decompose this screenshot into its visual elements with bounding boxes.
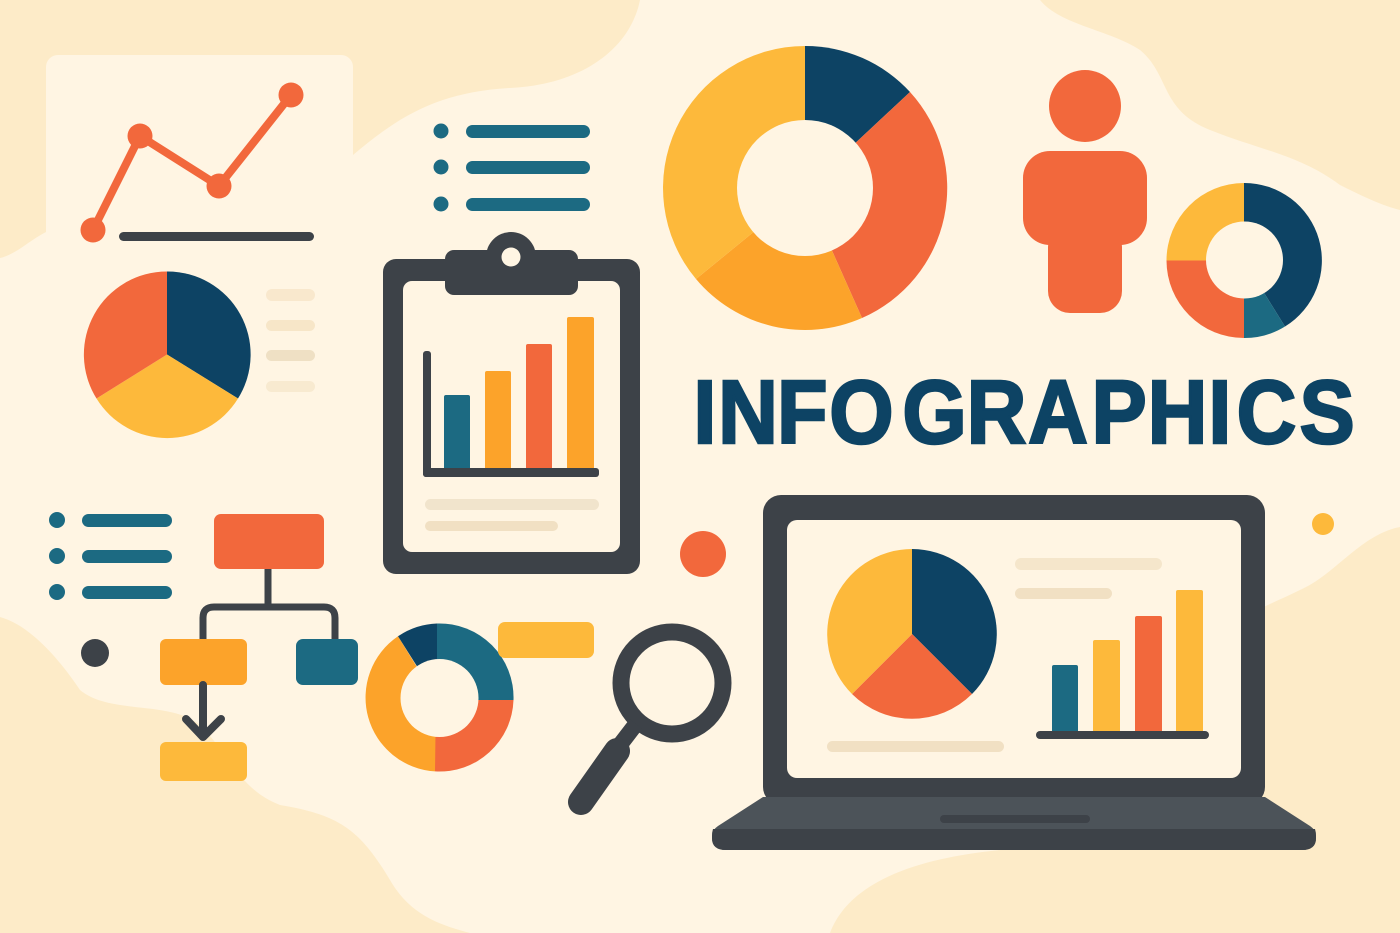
panel: line chart xyxy=(46,55,353,245)
laptop xyxy=(712,495,1316,850)
clipboard text lines xyxy=(425,499,599,531)
dot: red xyxy=(680,531,726,577)
laptop pie chart xyxy=(827,549,997,719)
pie legend placeholder lines xyxy=(266,289,315,392)
flowchart top box xyxy=(214,514,324,569)
flowchart connectors xyxy=(203,569,335,640)
pie chart: left xyxy=(84,271,251,438)
donut chart: large xyxy=(663,46,947,330)
line chart trend line xyxy=(93,95,291,230)
line chart data points xyxy=(80,82,304,242)
flowchart amber box xyxy=(160,639,247,685)
laptop screen xyxy=(787,520,1241,778)
dot: dark xyxy=(81,639,109,667)
yellow label box xyxy=(498,622,594,658)
bullet list: top xyxy=(434,124,590,212)
clipboard with bar chart xyxy=(383,232,640,574)
dot: yellow xyxy=(1312,513,1334,535)
donut chart: bottom xyxy=(366,623,514,772)
line chart baseline xyxy=(119,232,314,241)
laptop screen frame xyxy=(763,495,1265,805)
laptop bar chart xyxy=(1036,590,1209,739)
clipboard bar chart xyxy=(423,317,599,477)
icon: magnifying glass xyxy=(581,632,723,802)
laptop text lines xyxy=(827,558,1162,752)
icon: person xyxy=(1023,70,1147,313)
bullet list: left xyxy=(49,512,172,600)
arrow: flowchart down xyxy=(186,685,221,737)
flowchart xyxy=(160,514,358,781)
clipboard clip xyxy=(445,232,578,295)
flowchart bottom box xyxy=(160,742,247,781)
donut chart: right xyxy=(1166,183,1322,338)
flowchart teal box xyxy=(296,639,358,685)
title: INFOGRAPHICS xyxy=(693,363,1355,463)
laptop base xyxy=(712,797,1316,850)
